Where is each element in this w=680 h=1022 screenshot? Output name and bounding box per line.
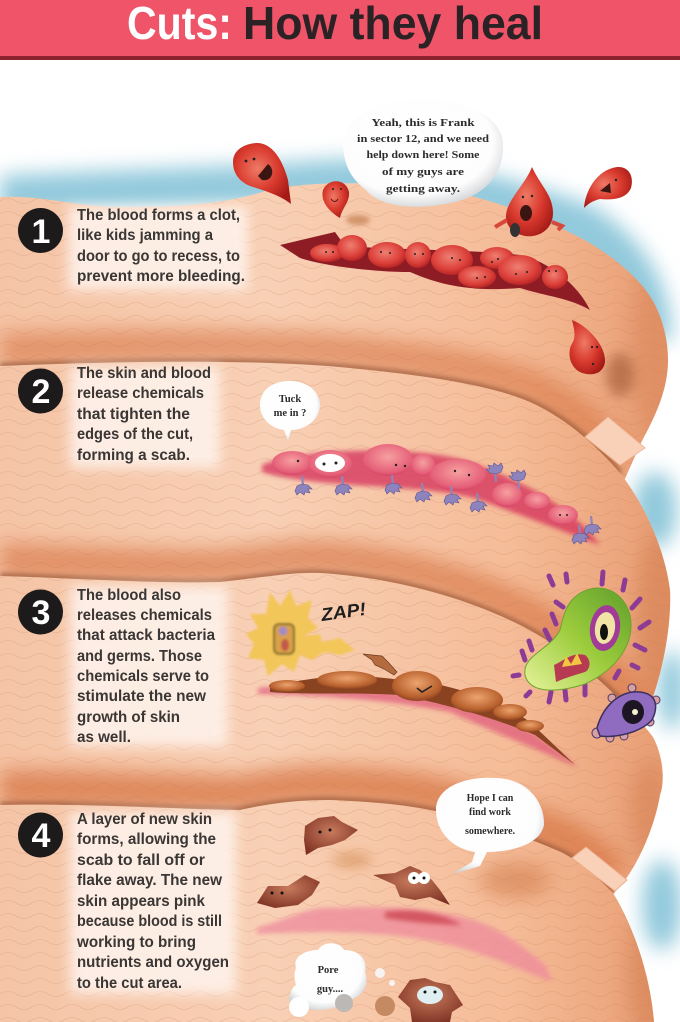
step 3 text: stimulate the new — [77, 688, 207, 705]
step 4 text: flake away. The new — [77, 872, 223, 889]
header banner — [0, 0, 680, 60]
pink cells — [272, 444, 578, 525]
fingernail 1 — [585, 417, 645, 465]
clot cells — [310, 235, 568, 289]
step 1 text: The blood forms a clot, — [77, 207, 240, 224]
step 2 text — [77, 365, 211, 464]
drop: right laughing — [584, 167, 632, 208]
finger 4 skin — [0, 795, 680, 1022]
thought bubble: Pore guy: Pore — [318, 965, 339, 976]
fingernail 2 — [572, 847, 627, 891]
speech bubble: work — [436, 778, 544, 874]
speech bubble: Frank: of my guys are — [382, 167, 464, 178]
scar dark spot — [385, 911, 462, 925]
badge 1 — [18, 208, 63, 253]
finger 2 skin — [0, 362, 670, 698]
step 4 text — [76, 811, 229, 992]
step 4: scar — [257, 907, 553, 982]
badge 2: 2 — [32, 373, 50, 411]
badge 3 — [18, 590, 63, 634]
step 4 text: forms, allowing the — [77, 831, 216, 848]
step 3 text: chemicals serve to — [77, 668, 209, 685]
speech bubble: Tuck me in: me in ? — [274, 408, 306, 419]
zap label: ZAP! — [319, 599, 367, 625]
eyes — [315, 454, 345, 472]
step 3 text: releases chemicals — [77, 607, 212, 624]
step 3 text — [77, 587, 215, 746]
speech bubble: Tuck me in: Tuck — [279, 394, 301, 405]
green bacterium — [513, 572, 649, 702]
pink edge — [258, 685, 578, 768]
step 4 text: scab to fall off or — [77, 852, 205, 869]
drop: laughing — [233, 143, 291, 204]
step 3: scab — [258, 654, 578, 768]
thought bubble: Pore guy: guy.... — [317, 984, 344, 995]
purple hands — [295, 463, 601, 544]
step 4 text: working to bring — [76, 934, 196, 951]
speech bubble: Frank: Yeah, this is Frank — [372, 118, 475, 129]
step 1 text — [77, 207, 245, 285]
mouth — [554, 654, 590, 682]
eye — [587, 603, 623, 653]
step 2 text: that tighten the — [77, 406, 190, 423]
step 4 text: skin appears pink — [77, 893, 205, 910]
badge 1: 1 — [32, 213, 50, 251]
speech bubble: Frank — [343, 100, 503, 207]
step 2: scab forming — [262, 444, 601, 545]
step 3 text: that attack bacteria — [77, 627, 215, 644]
step 2 text: edges of the cut, — [77, 426, 193, 443]
step 2 text: release chemicals — [77, 385, 204, 402]
step 1 text: door to go to recess, to — [77, 248, 240, 265]
badge 4: 4 — [32, 817, 51, 855]
speech bubble: work: find work — [469, 807, 511, 818]
text glow panels — [68, 206, 248, 994]
spikes — [513, 572, 649, 702]
step 1: clot wound — [280, 232, 590, 310]
drop: small smile — [322, 181, 349, 218]
finger 1 skin — [0, 183, 668, 480]
blood drop characters — [233, 143, 632, 374]
badge 4 — [18, 812, 63, 858]
cell faces — [325, 251, 557, 279]
scab segments — [269, 671, 544, 732]
step 1 text: prevent more bleeding. — [77, 268, 245, 285]
step 4 text: A layer of new skin — [77, 811, 212, 828]
scab base band — [270, 676, 575, 765]
blue halo behind skin — [0, 159, 680, 950]
zapped germ — [246, 590, 355, 676]
badge 2 — [18, 368, 63, 414]
wound gash — [280, 232, 590, 310]
step 2 text: forming a scab. — [77, 447, 190, 464]
flake bottom — [398, 978, 463, 1022]
step 4 text: to the cut area. — [77, 975, 182, 992]
step 3 text: and germs. Those — [77, 648, 202, 665]
flake left — [257, 875, 320, 908]
flake top — [304, 816, 358, 855]
step 3 text: as well. — [77, 729, 131, 746]
flake eyed — [373, 866, 450, 905]
step 4 text: because blood is still — [77, 913, 222, 930]
speech bubble: Frank: getting away. — [386, 184, 460, 195]
finger 3 skin — [0, 572, 663, 894]
step 4 text: nutrients and oxygen — [77, 954, 229, 971]
step 1 text: like kids jamming a — [77, 227, 213, 244]
speech bubble: Frank: in sector 12, and we need — [357, 134, 489, 145]
speech bubble: Tuck me in — [260, 381, 320, 441]
pointing hand — [363, 654, 397, 675]
speech bubble: Frank: help down here! Some — [366, 150, 480, 161]
step 2 text: The skin and blood — [77, 365, 211, 382]
speech bubble: work: Hope I can — [467, 793, 514, 804]
step 3 text: The blood also — [77, 587, 181, 604]
badge 3: 3 — [32, 594, 50, 632]
pink streak — [262, 451, 600, 545]
drop: screaming on phone — [495, 167, 562, 237]
angry eyes — [417, 686, 432, 692]
step 3 text: growth of skin — [77, 709, 180, 726]
flake characters — [257, 816, 463, 1022]
speech bubble: work: somewhere. — [465, 826, 516, 837]
thought bubble: Pore guy — [289, 943, 395, 1017]
drop: falling — [569, 320, 605, 374]
purple germ — [592, 684, 660, 742]
